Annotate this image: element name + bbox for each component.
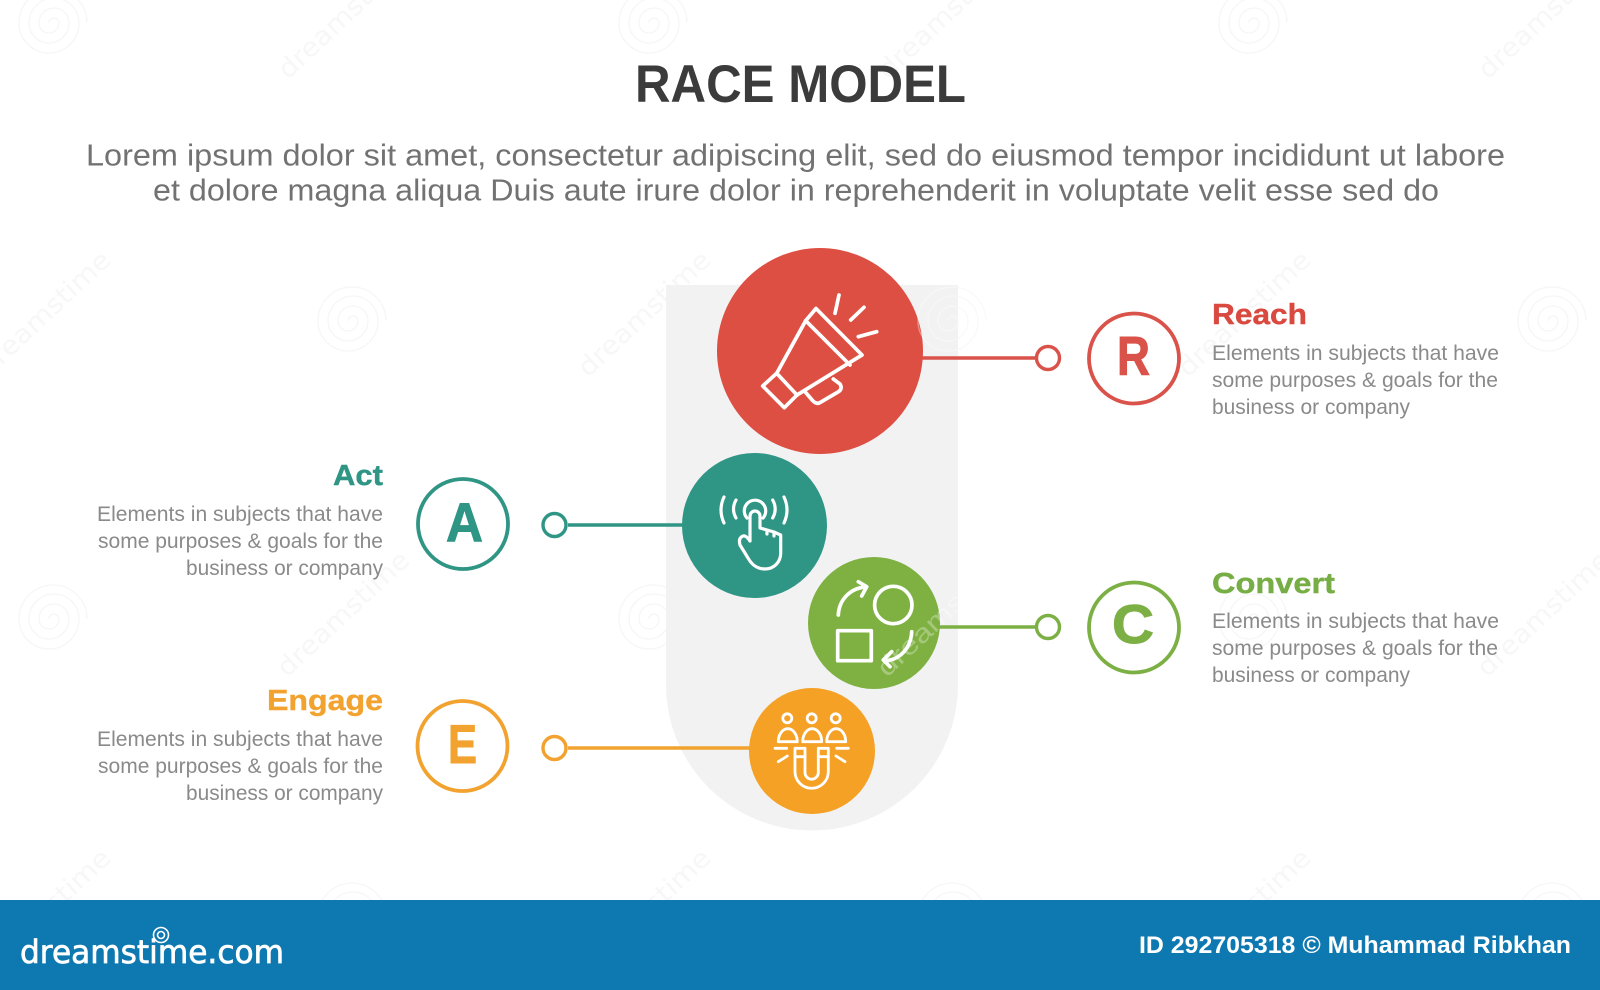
text block: Reach: Reach	[1212, 299, 1307, 331]
watermark pattern: dreamstime	[572, 245, 717, 383]
text block: Act	[97, 460, 383, 580]
badge: E: E	[448, 713, 477, 775]
watermark pattern: dreamstime	[1172, 843, 1317, 981]
badge: C	[1089, 582, 1179, 672]
subtitle text block	[86, 138, 1505, 208]
text block: Act: Act	[333, 460, 383, 492]
step: Reach connector	[920, 346, 1060, 370]
watermark pattern: dreamstime	[271, 545, 416, 683]
text block: Convert: Elements in subjects that have	[1212, 609, 1499, 633]
text block: Engage: Engage	[267, 685, 383, 717]
icon: tapping hand	[721, 497, 787, 569]
text block: Reach: some purposes & goals for the	[1212, 368, 1498, 392]
text block: Act: Elements in subjects that have	[97, 502, 383, 526]
badge: R	[1089, 314, 1179, 404]
subtitle text block: et dolore magna aliqua Duis aute irure dolor in reprehenderit in voluptate velit esse sed do	[153, 172, 1439, 208]
watermark pattern: dreamstime	[572, 843, 717, 981]
watermark pattern: dreamstime	[1172, 245, 1317, 383]
text block: Act: business or company	[186, 556, 383, 580]
circle: Engage magnet	[749, 688, 875, 814]
text block: Act: some purposes & goals for the	[98, 529, 383, 553]
subtitle text block: Lorem ipsum dolor sit amet, consectetur adipiscing elit, sed do eiusmod tempor incididunt ut labore	[86, 138, 1505, 172]
badge: R: R	[1117, 325, 1150, 387]
text block: Engage	[97, 685, 383, 805]
icon: logo spiral	[154, 928, 168, 942]
title: RACE MODEL	[635, 55, 966, 114]
footer credit: ID 292705318 © Muhammad Ribkhan	[1139, 932, 1571, 959]
step: Act connector	[543, 514, 684, 536]
icon: people and magnet	[775, 714, 848, 788]
circle: Reach megaphone	[717, 248, 923, 454]
step: Engage connector	[543, 736, 751, 760]
text block: Reach: business or company	[1212, 395, 1410, 419]
text block: Convert: some purposes & goals for the	[1212, 636, 1498, 660]
badge: C: C	[1112, 593, 1154, 655]
badge: A	[418, 479, 508, 569]
step: Convert connector	[936, 616, 1060, 638]
icon: megaphone	[763, 295, 877, 408]
text block: Convert: Convert	[1212, 568, 1335, 600]
capsule background panel	[666, 285, 958, 830]
badge: A: A	[446, 491, 483, 553]
circle: Act tap	[682, 453, 827, 598]
text block: Convert: business or company	[1212, 663, 1410, 687]
footer logo: dreamstime.com	[20, 933, 284, 971]
watermark overlay on circles: dreamstime	[871, 545, 1015, 682]
badge: E	[418, 701, 508, 791]
text block: Convert	[1212, 568, 1499, 687]
footer band	[0, 900, 1600, 990]
text block: Engage: Elements in subjects that have	[97, 727, 383, 751]
text block: Reach	[1212, 299, 1499, 419]
icon: shapes with arrows	[838, 582, 912, 667]
text block: Engage: business or company	[186, 781, 383, 805]
text block: Reach: Elements in subjects that have	[1212, 341, 1499, 365]
text block: Engage: some purposes & goals for the	[98, 754, 383, 778]
circle: Convert shapes	[808, 557, 940, 689]
watermark overlay on circles	[871, 287, 1015, 682]
